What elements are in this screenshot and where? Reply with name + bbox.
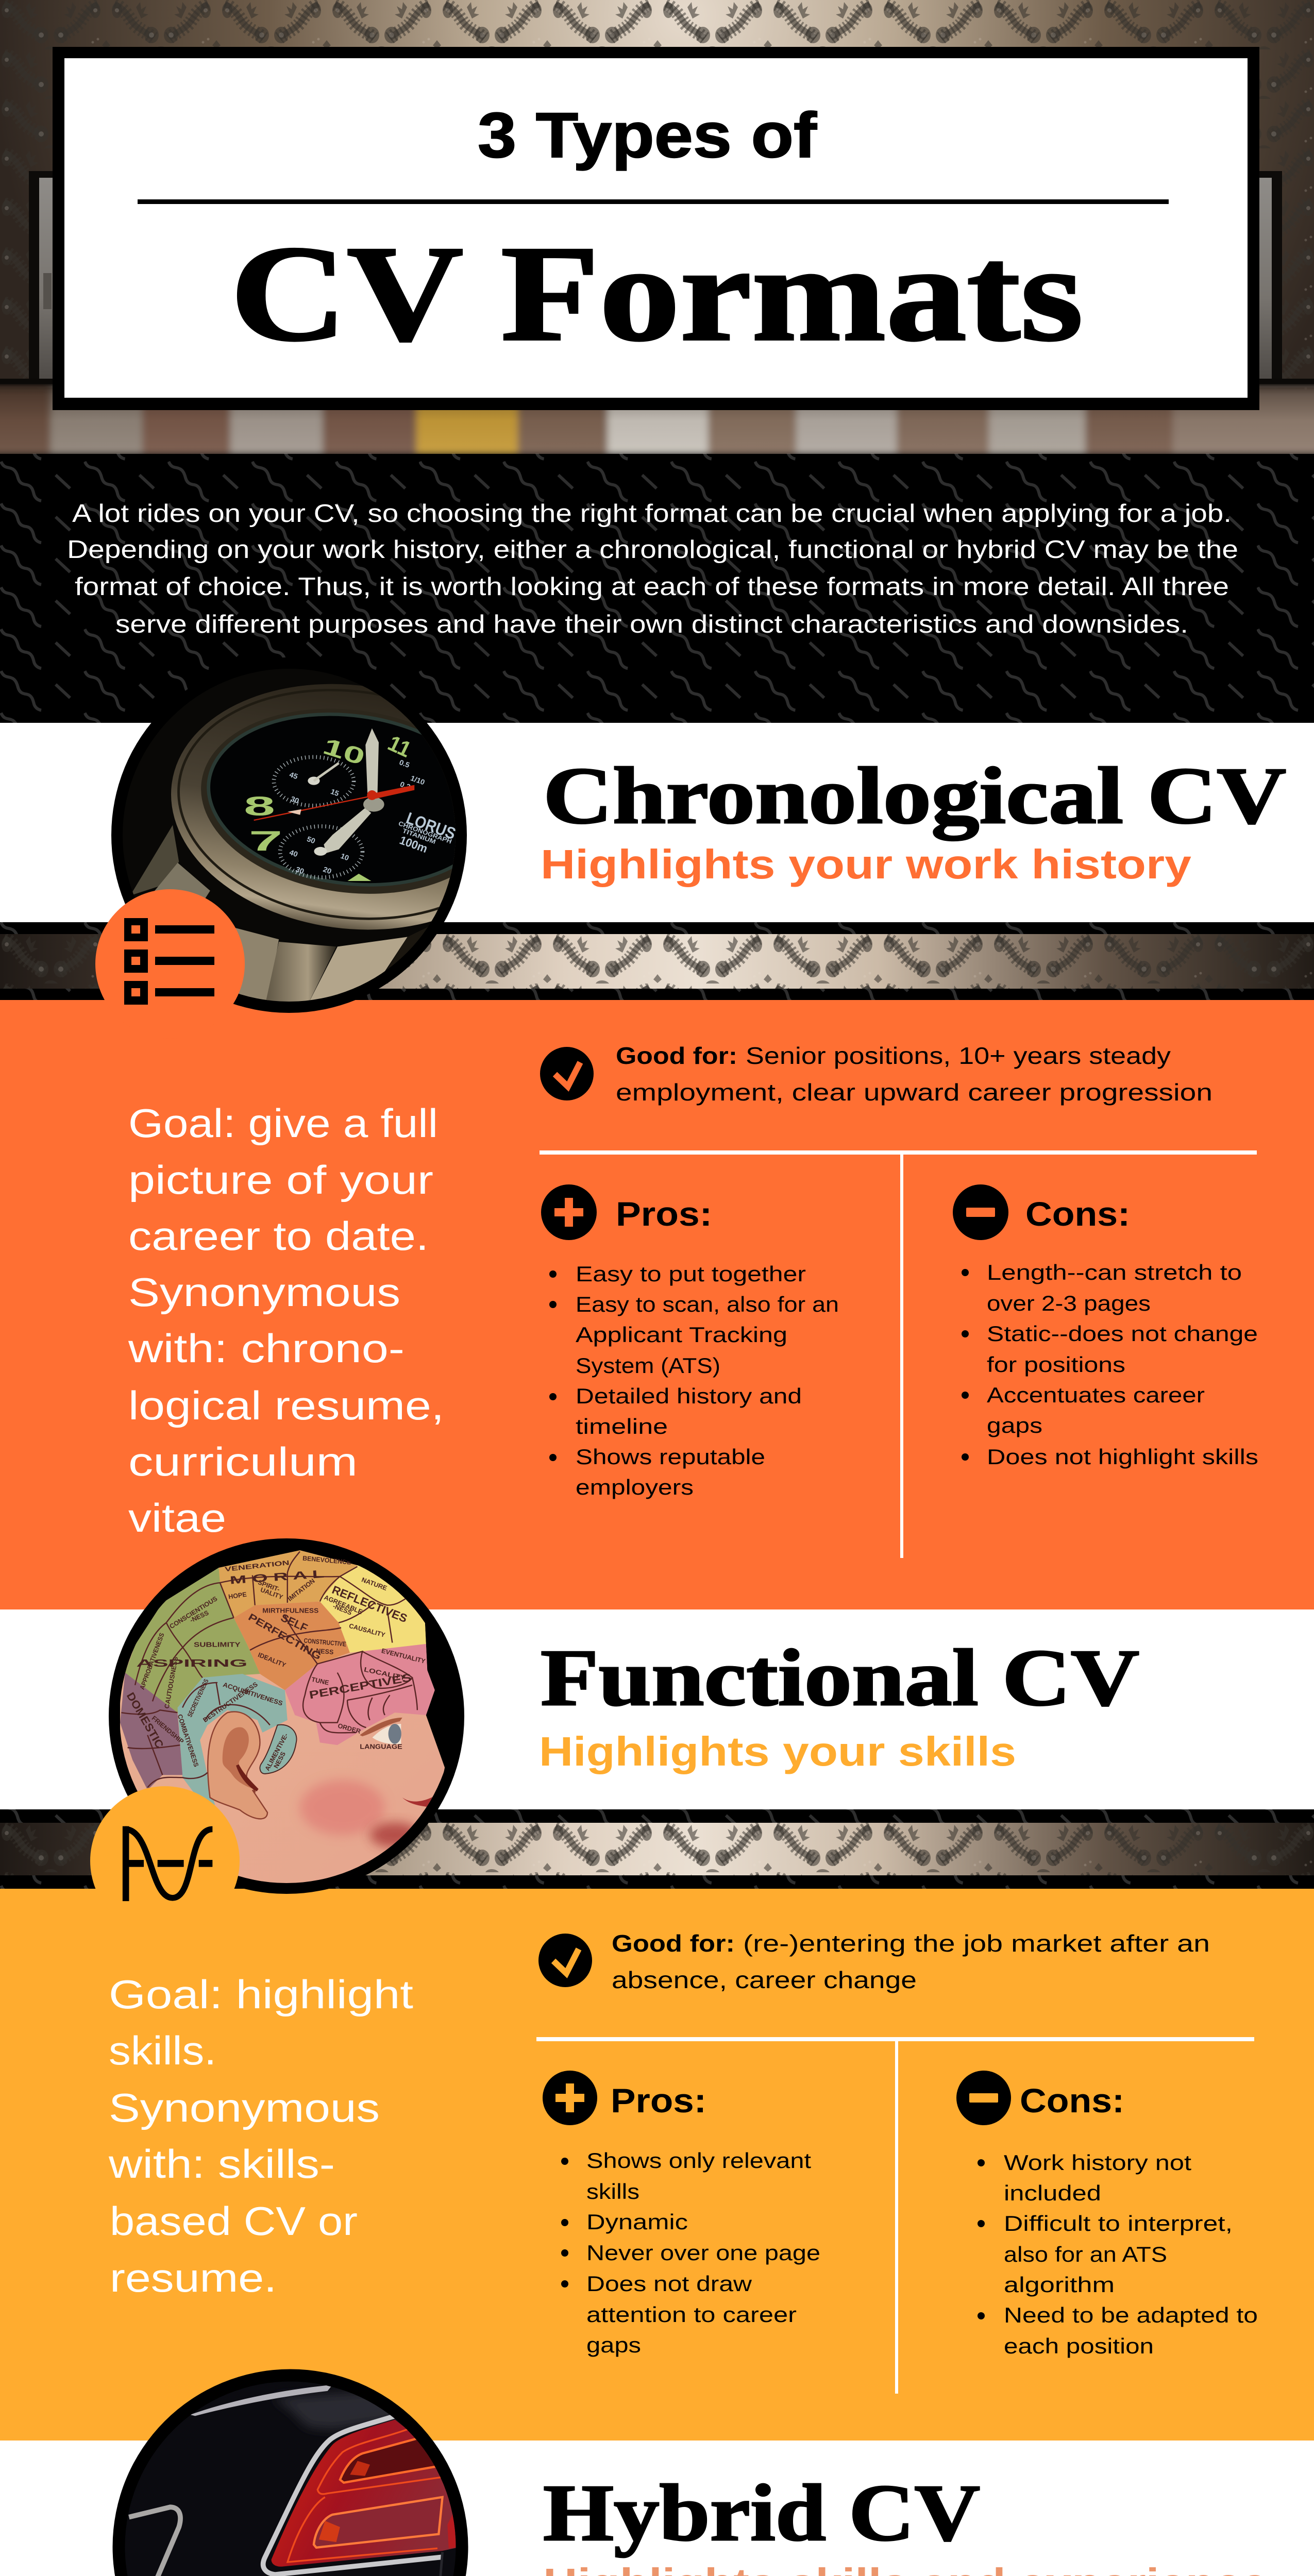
photo: phrenology head: PERCEPTIVES — [308, 1671, 412, 1701]
good for — [540, 1042, 1212, 1106]
goal text: career to date. — [128, 1213, 429, 1259]
heading: Functional CV: Functional CV — [541, 1633, 1139, 1722]
pros: attention to career — [586, 2302, 797, 2327]
good for — [538, 1930, 1210, 1993]
white title band — [0, 723, 1314, 922]
icon: minus — [953, 1184, 1008, 1240]
photo: watch: 30 — [294, 866, 305, 876]
cons: Does not highlight skills — [987, 1445, 1258, 1469]
wallpaper strip — [0, 934, 1314, 989]
section: chronological CV — [0, 657, 1314, 1610]
photo: phrenology head: HOPE — [228, 1591, 247, 1601]
section: hybrid CV — [0, 2369, 1314, 2576]
photo: phrenology head: SPIRIT- — [257, 1579, 281, 1593]
photo: phrenology head: ACQUISITIVENESS — [222, 1681, 283, 1707]
photo: watch: 10 — [319, 733, 368, 770]
photo: phrenology head: FRIENDSHIP — [150, 1715, 185, 1745]
cons: Cons: — [1025, 1195, 1130, 1233]
icon: check — [538, 1934, 592, 1987]
cons: over 2-3 pages — [987, 1291, 1151, 1315]
pros: Easy to put together — [576, 1262, 806, 1286]
photo: phrenology head: TUNE — [311, 1676, 330, 1687]
pros: Never over one page — [586, 2241, 820, 2265]
photo: phrenology head: SUBLIMITY — [194, 1641, 241, 1649]
photo: phrenology head: AGREEABLE — [323, 1594, 363, 1616]
photo: phrenology head: IMITATION — [287, 1577, 316, 1603]
goal text: Synonymous — [128, 1269, 400, 1315]
good for: Good for: — [616, 1042, 737, 1069]
goal text: curriculum — [128, 1439, 358, 1484]
intro paragraph: Depending on your work history, either a chronological, functional or hybrid CV may be the — [67, 536, 1238, 564]
intro paragraph: A lot rides on your CV, so choosing the right format can be crucial when applying for a job. — [72, 500, 1232, 528]
photo: phrenology head: ORDER — [337, 1722, 361, 1735]
photo: phrenology head: APPROBATIVENESS — [139, 1632, 166, 1691]
title line 2: CV Formats — [230, 217, 1083, 369]
icon: sine wave — [90, 1786, 240, 1936]
pros: employers — [576, 1475, 694, 1499]
pros: Applicant Tracking — [576, 1323, 787, 1347]
white title band — [0, 1609, 1314, 1809]
photo: watch: LORUS — [403, 809, 458, 843]
cons — [953, 1184, 1258, 1469]
pros: Detailed history and — [576, 1384, 802, 1408]
photo: watch — [111, 657, 467, 1013]
photo: phrenology head: SECRETIVENESS — [186, 1678, 210, 1718]
good for: Senior positions, 10+ years steady — [746, 1042, 1171, 1069]
photo: phrenology head: ALIMENTIVE- — [264, 1732, 290, 1772]
pros: Pros: — [611, 2081, 706, 2120]
pros: Shows reputable — [576, 1445, 765, 1469]
goal text: with: skills- — [108, 2141, 335, 2187]
photo: phrenology head: LANGUAGE — [360, 1743, 402, 1750]
cons: Accentuates career — [987, 1383, 1205, 1407]
intro paragraph — [67, 500, 1238, 638]
photo: phrenology head: CAUTIOUSNESS — [163, 1656, 179, 1709]
goal text: vitae — [128, 1495, 226, 1540]
icon: check — [540, 1047, 594, 1100]
photo: watch: 100m — [398, 833, 429, 855]
heading: Chronological CV: Chronological CV — [543, 751, 1286, 841]
cons: each position — [1004, 2334, 1154, 2358]
photo: phrenology head: M O R A L — [229, 1568, 325, 1587]
cons: algorithm — [1004, 2273, 1115, 2297]
pros: System (ATS) — [576, 1353, 720, 1378]
photo: watch: 8 — [244, 791, 275, 821]
photo: watch: 30 — [290, 795, 300, 805]
goal text: logical resume, — [128, 1383, 444, 1428]
photo: watch: 7 — [249, 825, 282, 857]
photo: phrenology head: -NESS — [313, 1647, 334, 1656]
photo: watch: CHRONOGRAPH — [397, 820, 453, 845]
goal text — [108, 1972, 413, 2300]
cons: Difficult to interpret, — [1004, 2211, 1233, 2235]
photo: hybrid car tail light — [112, 2369, 469, 2576]
goal text: with: chrono- — [128, 1326, 405, 1371]
goal text — [128, 1100, 444, 1540]
pros: Does not draw — [586, 2272, 752, 2296]
goal text: Goal: give a full — [128, 1100, 438, 1146]
pros: Pros: — [616, 1195, 712, 1233]
cons: included — [1004, 2181, 1101, 2205]
photo: phrenology head: -NESS — [189, 1609, 210, 1624]
photo: phrenology head: CONSCIENTIOUS — [169, 1595, 218, 1630]
cons: Need to be adapted to — [1004, 2303, 1258, 2327]
icon: minus — [956, 2071, 1011, 2125]
photo: phrenology head: IDEALITY — [257, 1651, 287, 1669]
photo: watch: 10 — [339, 852, 350, 862]
white title band — [0, 2441, 1314, 2576]
cons — [956, 2071, 1258, 2358]
photo: phrenology head: BENEVOLENCE — [302, 1555, 351, 1566]
pros — [543, 2071, 820, 2357]
photo: watch: 20 — [322, 866, 332, 876]
header photo: wallpapered room — [0, 0, 1314, 454]
photo: phrenology head: PERFECTING — [246, 1612, 323, 1663]
pros: Shows only relevant — [586, 2148, 811, 2173]
icon: plus — [541, 1184, 597, 1240]
photo: phrenology head: REFLECTIVES — [330, 1583, 409, 1625]
photo: watch: 0.2 — [399, 781, 411, 791]
photo: watch: 1/10 — [409, 774, 426, 787]
photo: phrenology head: ASPIRING — [137, 1658, 247, 1669]
photo: phrenology head: -NESS — [332, 1602, 353, 1617]
cons: also for an ATS — [1004, 2242, 1167, 2266]
cons: gaps — [987, 1413, 1042, 1437]
photo: phrenology head: VENERATION — [224, 1559, 290, 1573]
photo: watch: 40 — [288, 849, 299, 859]
pros: timeline — [576, 1414, 668, 1438]
photo: phrenology head: DESTRUCTIVENESS — [201, 1681, 259, 1724]
photo: phrenology head: DOMESTIC — [124, 1690, 166, 1751]
orange panel — [0, 1000, 1314, 1610]
photo: phrenology head: NATURE — [361, 1576, 388, 1592]
icon: checklist — [95, 889, 245, 1039]
subheading: Highlights your work history — [541, 841, 1192, 887]
photo: phrenology head: EVENTUALITY — [381, 1647, 426, 1665]
photo: phrenology head: LOCALITY — [363, 1666, 407, 1682]
goal text: picture of your — [128, 1157, 433, 1202]
intro paragraph: format of choice. Thus, it is worth looking at each of these formats in more detail. All three — [75, 573, 1229, 601]
photo: watch: 0.5 — [398, 758, 411, 770]
wallpaper strip — [0, 1823, 1314, 1875]
cons: Static--does not change — [987, 1321, 1258, 1346]
good for: absence, career change — [612, 1967, 917, 1993]
goal text: resume. — [110, 2255, 277, 2300]
cons: Length--can stretch to — [987, 1260, 1242, 1284]
title card — [53, 47, 1259, 410]
pros: gaps — [586, 2333, 641, 2357]
pros: Easy to scan, also for an — [576, 1292, 839, 1316]
photo: watch: 11 — [384, 731, 415, 762]
photo: phrenology head: COMBATIVENESS — [176, 1714, 200, 1768]
photo: phrenology head: CAUSALITY — [348, 1622, 386, 1639]
pros — [541, 1184, 839, 1499]
photo: watch: 50 — [306, 835, 316, 845]
photo: phrenology head: MIRTHFULNESS — [262, 1607, 318, 1614]
pros: Dynamic — [586, 2210, 688, 2234]
goal text: Synonymous — [109, 2085, 380, 2130]
goal text: based CV or — [110, 2198, 358, 2244]
goal text: skills. — [109, 2028, 216, 2073]
goal text: Goal: highlight — [109, 1972, 413, 2017]
heading: Hybrid CV: Hybrid CV — [543, 2468, 980, 2557]
photo: watch: 45 — [288, 771, 299, 781]
good for: Good for: — [612, 1930, 735, 1957]
photo: phrenology head: UALITY — [259, 1586, 284, 1601]
photo: phrenology head: CONSTRUCTIVE — [304, 1637, 346, 1648]
photo: phrenology head: SELF — [279, 1612, 310, 1634]
title line 1: 3 Types of — [478, 100, 817, 171]
photo: watch: TITANIUM — [401, 827, 437, 845]
subheading: Highlights your skills — [539, 1728, 1016, 1774]
cons: for positions — [987, 1352, 1125, 1377]
cons: Work history not — [1004, 2150, 1191, 2175]
section: functional CV — [0, 1538, 1314, 2441]
intro paragraph: serve different purposes and have their own distinct characteristics and downsides. — [115, 611, 1188, 638]
photo: phrenology head: NESS — [273, 1751, 287, 1770]
cons: Cons: — [1020, 2081, 1124, 2120]
icon: plus — [543, 2071, 597, 2125]
photo: phrenology head — [103, 1538, 474, 1894]
yellow panel — [0, 1889, 1314, 2441]
pros: skills — [586, 2179, 639, 2204]
photo: watch: 15 — [329, 788, 340, 798]
good for: employment, clear upward career progression — [616, 1079, 1212, 1106]
good for: (re-)entering the job market after an — [743, 1930, 1210, 1957]
